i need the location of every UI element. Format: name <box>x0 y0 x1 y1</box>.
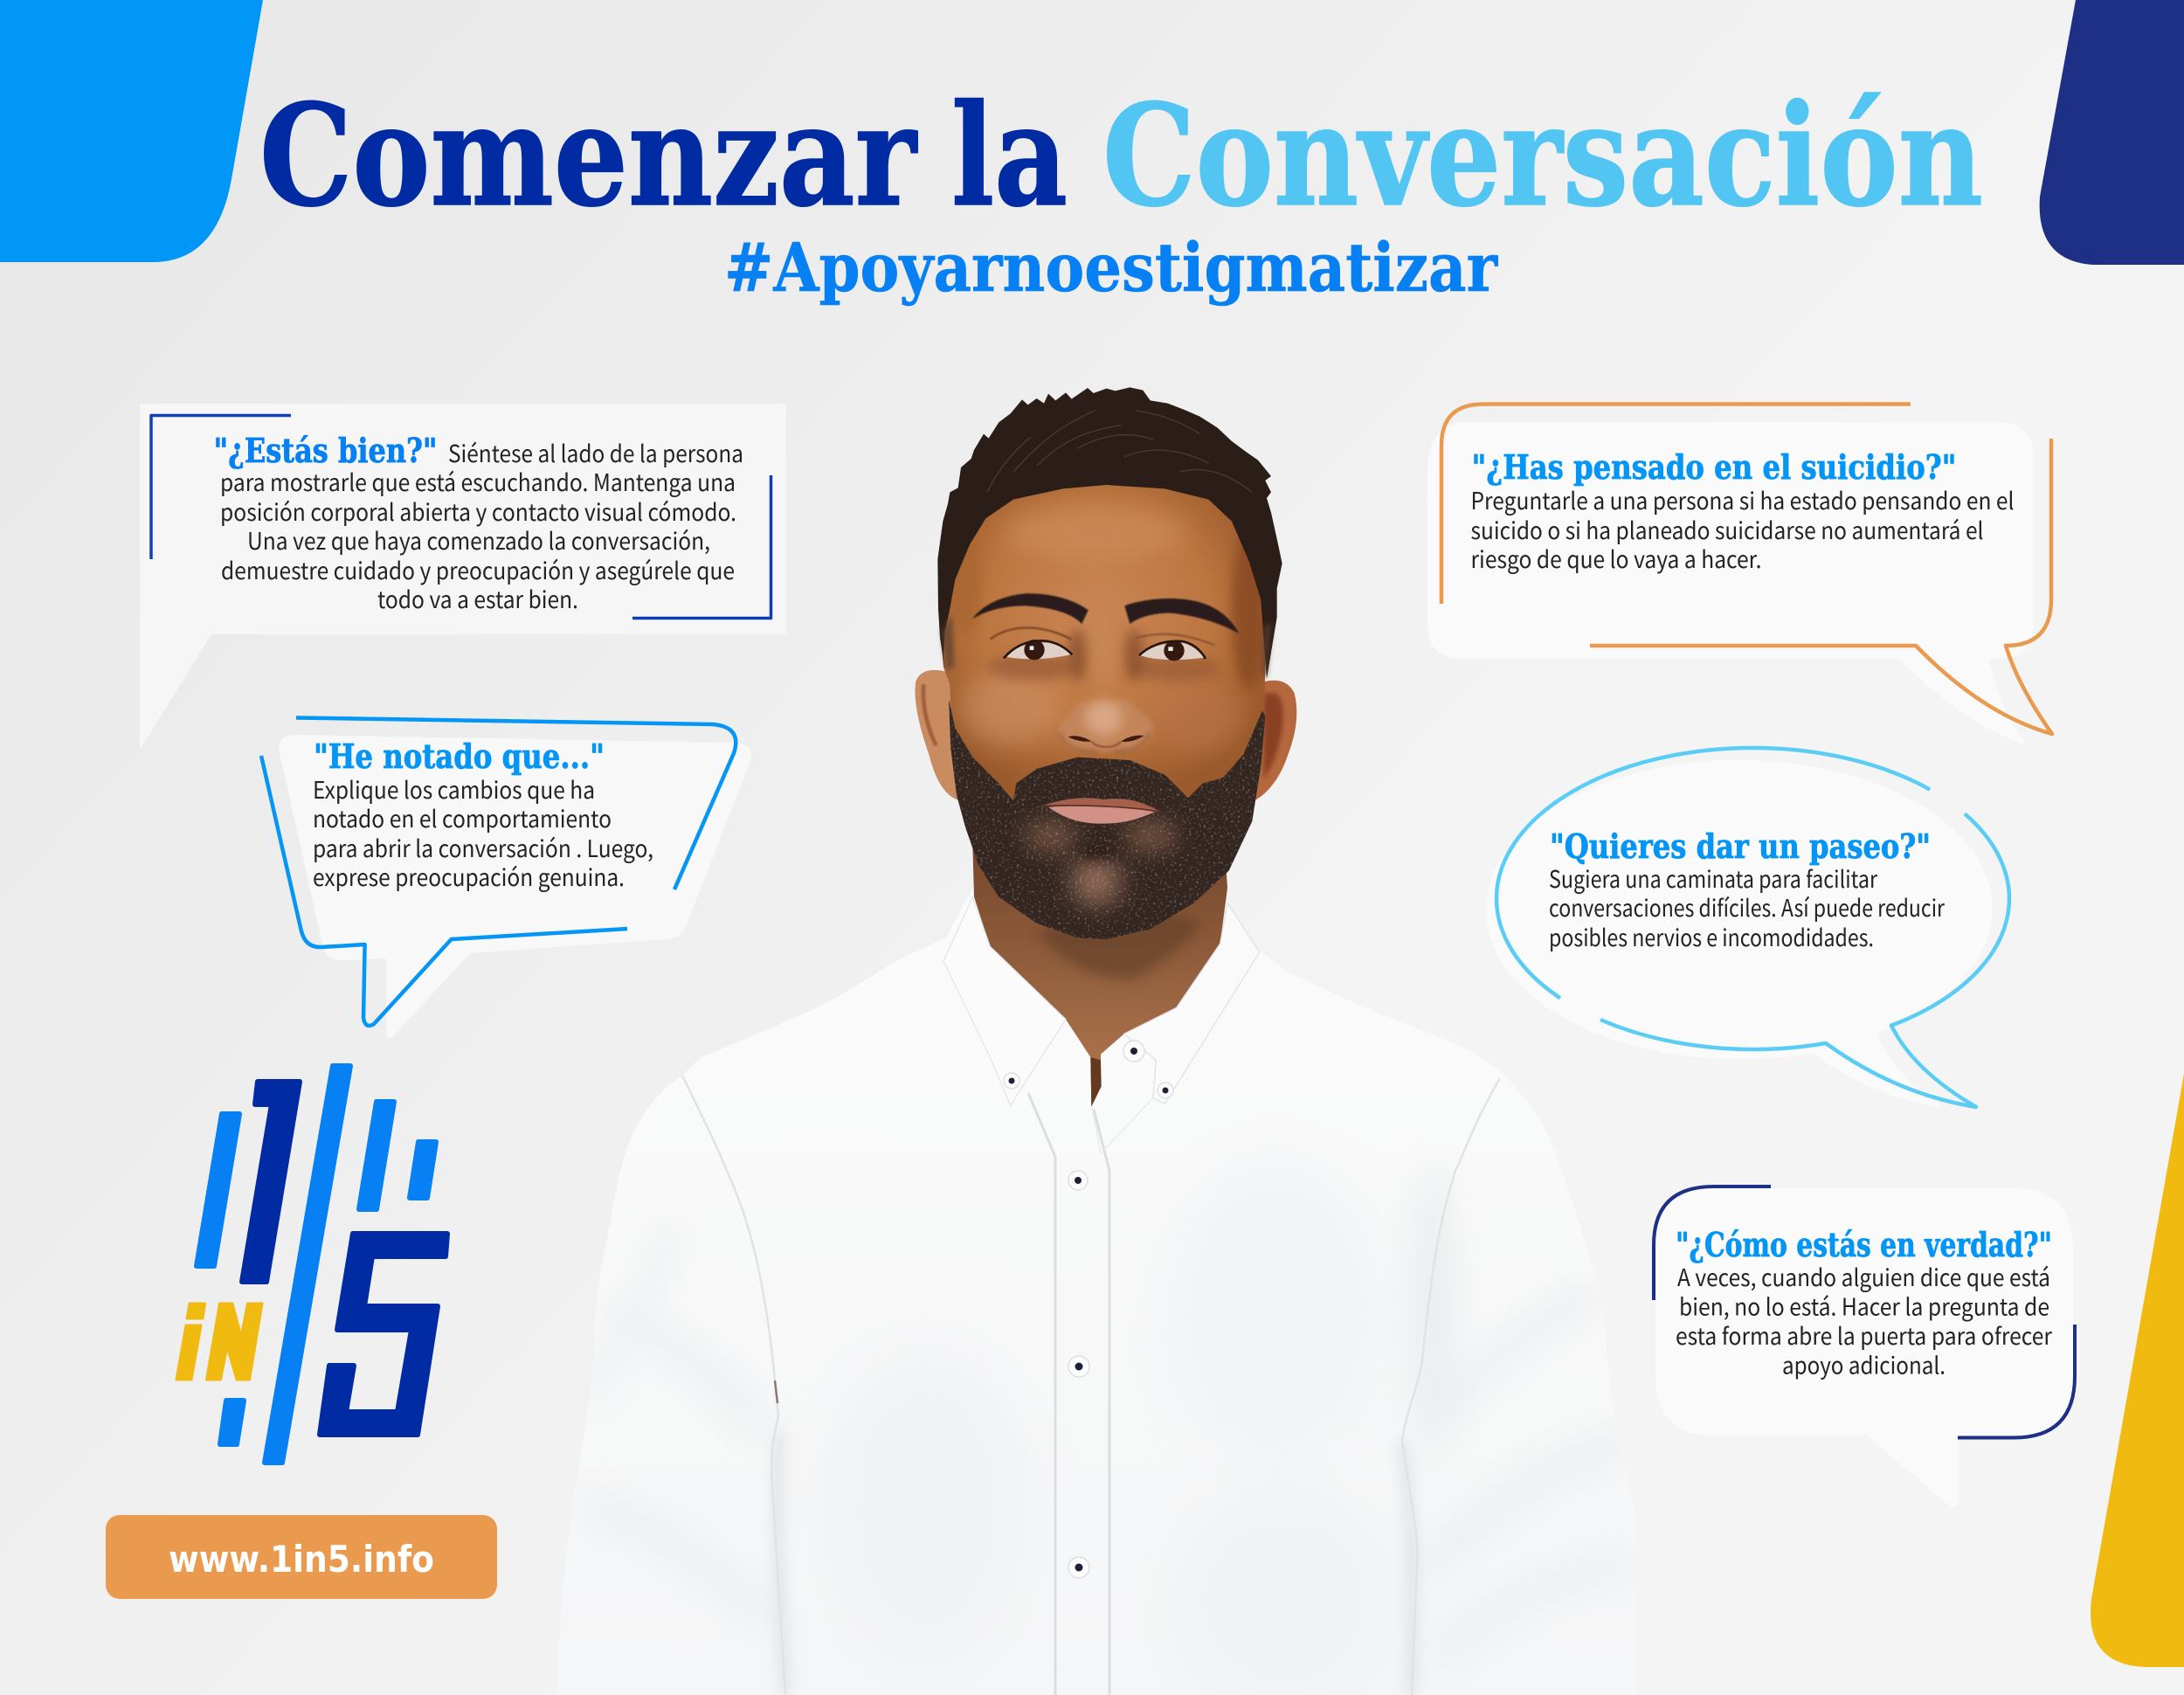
beard lighter chin patches <box>1025 821 1177 906</box>
body text <box>1676 1259 2052 1380</box>
shirt <box>598 886 1501 1695</box>
body text: posibles nervios e incomodidades. <box>1549 919 1874 953</box>
corner shape: top left blue <box>0 0 263 262</box>
beard <box>949 699 1265 939</box>
logo numeral 1 <box>242 1082 300 1282</box>
speech bubble: ¿Estás bien? <box>140 404 786 751</box>
face skin <box>939 474 1266 830</box>
body text: esta forma abre la puerta para ofrecer <box>1676 1318 2052 1352</box>
body text <box>220 435 743 615</box>
body text <box>313 771 653 893</box>
speech bubble: ¿Has pensado en el suicidio? <box>1427 404 2052 745</box>
title: Comenzar <box>259 73 917 238</box>
person portrait <box>542 387 1651 1695</box>
bubble background <box>1427 422 2034 745</box>
bubble background <box>140 404 786 751</box>
body text: demuestre cuidado y preocupación y asegúrele que <box>221 552 735 586</box>
speech bubble: ¿Cómo estás en verdad? <box>1654 1186 2075 1507</box>
speech bubble: Quieres dar un paseo <box>1486 748 2009 1108</box>
body text: posición corporal abierta y contacto visual cómodo. <box>220 494 736 528</box>
hair <box>937 387 1282 679</box>
logo numeral 5 <box>320 1234 447 1435</box>
logo: 1 in 5 <box>176 1066 447 1463</box>
neck and collar <box>943 815 1260 1153</box>
body text: exprese preocupación genuina. <box>313 859 625 893</box>
body text: para mostrarle que está escuchando. Mantenga una <box>220 464 736 498</box>
body text: A veces, cuando alguien dice que está <box>1677 1259 2050 1293</box>
website button <box>106 1515 497 1599</box>
ears <box>915 670 1296 800</box>
body text: notado en el comportamiento <box>313 800 612 834</box>
blue outline <box>261 718 736 1026</box>
body text: apoyo adicional. <box>1782 1347 1946 1380</box>
title <box>259 73 1983 238</box>
logo word iN <box>176 1304 262 1380</box>
heading: "¿Estás bien?" <box>213 431 437 470</box>
title: Conversación <box>1102 73 1983 238</box>
heading: "Quieres dar un paseo?" <box>1550 827 1931 866</box>
hair highlights <box>987 411 1252 492</box>
eyes <box>990 627 1214 661</box>
title: la <box>951 73 1068 238</box>
body text: para abrir la conversación . Luego, <box>313 830 653 864</box>
eyebrows <box>972 593 1239 633</box>
corner shape: top right navy <box>2040 0 2184 265</box>
heading: "¿Cómo estás en verdad?" <box>1676 1225 2052 1264</box>
bubble background <box>1486 760 1993 1108</box>
head <box>915 387 1296 830</box>
body text: Siéntese al lado de la persona <box>448 435 743 469</box>
lips <box>1041 798 1160 824</box>
body text: Preguntarle a una persona si ha estado pensando en el <box>1471 482 2015 516</box>
shirt buttons <box>1004 1041 1173 1578</box>
body text: todo va a estar bien. <box>377 581 578 615</box>
bubble background <box>279 735 751 1038</box>
body text: conversaciones difíciles. Así puede reducir <box>1549 889 1945 924</box>
body text: bien, no lo está. Hacer la pregunta de <box>1679 1288 2049 1323</box>
body text <box>1549 861 1945 953</box>
logo bars light blue <box>197 1066 436 1463</box>
nose <box>1058 699 1154 752</box>
body text: Explique los cambios que ha <box>313 771 595 806</box>
light blue outline <box>1496 748 2009 1107</box>
blue bracket outline <box>151 416 771 619</box>
speech bubble: He notado que <box>261 718 751 1038</box>
body text: Sugiera una caminata para facilitar <box>1549 861 1877 895</box>
website button: www.1in5.info <box>169 1538 434 1581</box>
subtitle hashtag: #Apoyarnoestigmatizar <box>724 229 1498 308</box>
heading: "He notado que..." <box>314 737 605 776</box>
bubble background <box>1655 1188 2073 1507</box>
body text: Una vez que haya comenzado la conversación, <box>247 522 710 557</box>
heading: "¿Has pensado en el suicidio?" <box>1471 447 1957 487</box>
beard grey speckle <box>949 699 1265 939</box>
corner shape: bottom right yellow <box>2091 1074 2184 1667</box>
face light and shadow <box>952 507 1267 751</box>
body text: riesgo de que lo vaya a hacer. <box>1471 541 1761 575</box>
navy outline <box>1654 1186 2075 1438</box>
body text <box>1471 482 2015 575</box>
body text: suicido o si ha planeado suicidarse no aumentará el <box>1471 512 1983 546</box>
orange outline <box>1441 404 2052 734</box>
sideburn fade <box>941 614 1271 675</box>
